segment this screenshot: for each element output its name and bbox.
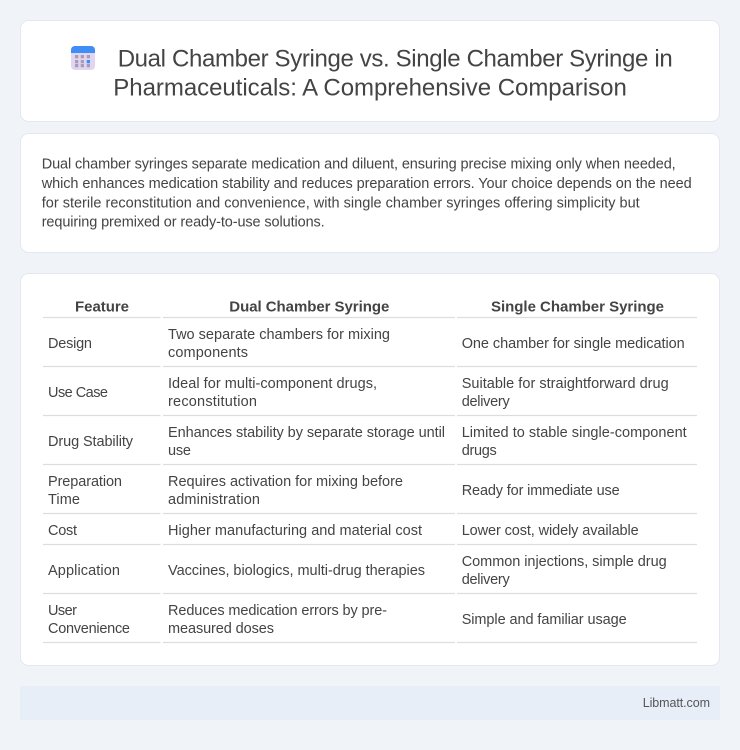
row: user convenience: measured doses: [168, 621, 274, 637]
panel: title header: [20, 20, 720, 122]
row: drug stability: [48, 425, 687, 459]
row: cost: Cost: [48, 523, 77, 539]
row: application: Application: [48, 563, 120, 579]
row: application: [48, 554, 667, 588]
icon: calendar: [71, 46, 95, 70]
row: drug stability: use: [168, 443, 191, 459]
table header: Dual Chamber Syringe: [229, 299, 389, 316]
title: Dual Chamber Syringe vs. Single Chamber Syringe in: [118, 46, 673, 73]
footer credit: Libmatt.com: [643, 696, 710, 710]
row: design: Two separate chambers for mixing: [168, 327, 390, 343]
table header: [75, 299, 664, 316]
row: application: Vaccines, biologics, multi-drug therapies: [168, 563, 425, 579]
row: application: Common injections, simple drug: [462, 554, 667, 570]
row: user convenience: Convenience: [48, 621, 130, 637]
row: user convenience: Reduces medication errors by pre-: [168, 603, 387, 619]
intro text: which enhances medication stability and reduces preparation errors. Your choice depends on the need: [41, 176, 692, 192]
panel: introduction: [20, 134, 720, 252]
row: preparation time: [48, 474, 620, 508]
row: preparation time: Preparation: [48, 474, 122, 490]
table header: Single Chamber Syringe: [491, 299, 664, 316]
footer bar: [20, 686, 720, 720]
intro text: Dual chamber syringes separate medication and diluent, ensuring precise mixing only when needed,: [42, 156, 676, 172]
row: cost: Lower cost, widely available: [462, 523, 639, 539]
row: use case: [48, 376, 669, 410]
row: user convenience: Simple and familiar usage: [462, 612, 627, 628]
row: design: [48, 327, 685, 361]
intro text: for sterile reconstitution and convenience, with single chamber syringes offering simplicity but: [42, 196, 640, 212]
row: cost: [48, 523, 639, 539]
table header: Feature: [75, 299, 129, 316]
row: drug stability: drugs: [462, 443, 497, 459]
row: drug stability: Enhances stability by separate storage until: [168, 425, 445, 441]
row: use case: reconstitution: [168, 394, 257, 410]
row: preparation time: Ready for immediate use: [462, 483, 620, 499]
title: [113, 46, 673, 102]
row: design: components: [168, 345, 248, 361]
row: design: Design: [48, 336, 92, 352]
row: user convenience: User: [48, 603, 77, 619]
row: application: delivery: [462, 572, 510, 588]
row: use case: Suitable for straightforward drug: [462, 376, 669, 392]
row: preparation time: Time: [48, 492, 80, 508]
intro text: [41, 156, 692, 230]
intro text: requiring premixed or ready-to-use solutions.: [42, 214, 325, 230]
row: preparation time: administration: [168, 492, 260, 508]
row dividers: [43, 318, 697, 642]
row: drug stability: Limited to stable single-component: [462, 425, 687, 441]
row: user convenience: [48, 603, 627, 637]
row: design: One chamber for single medication: [462, 336, 685, 352]
panel: comparison table: [20, 274, 720, 666]
row: use case: Use Case: [48, 385, 108, 401]
row: cost: Higher manufacturing and material cost: [168, 523, 422, 539]
row: drug stability: Drug Stability: [48, 434, 134, 450]
row: preparation time: Requires activation for mixing before: [168, 474, 403, 490]
row: use case: delivery: [462, 394, 510, 410]
title: Pharmaceuticals: A Comprehensive Comparison: [113, 75, 627, 102]
row: use case: Ideal for multi-component drugs,: [168, 376, 377, 392]
